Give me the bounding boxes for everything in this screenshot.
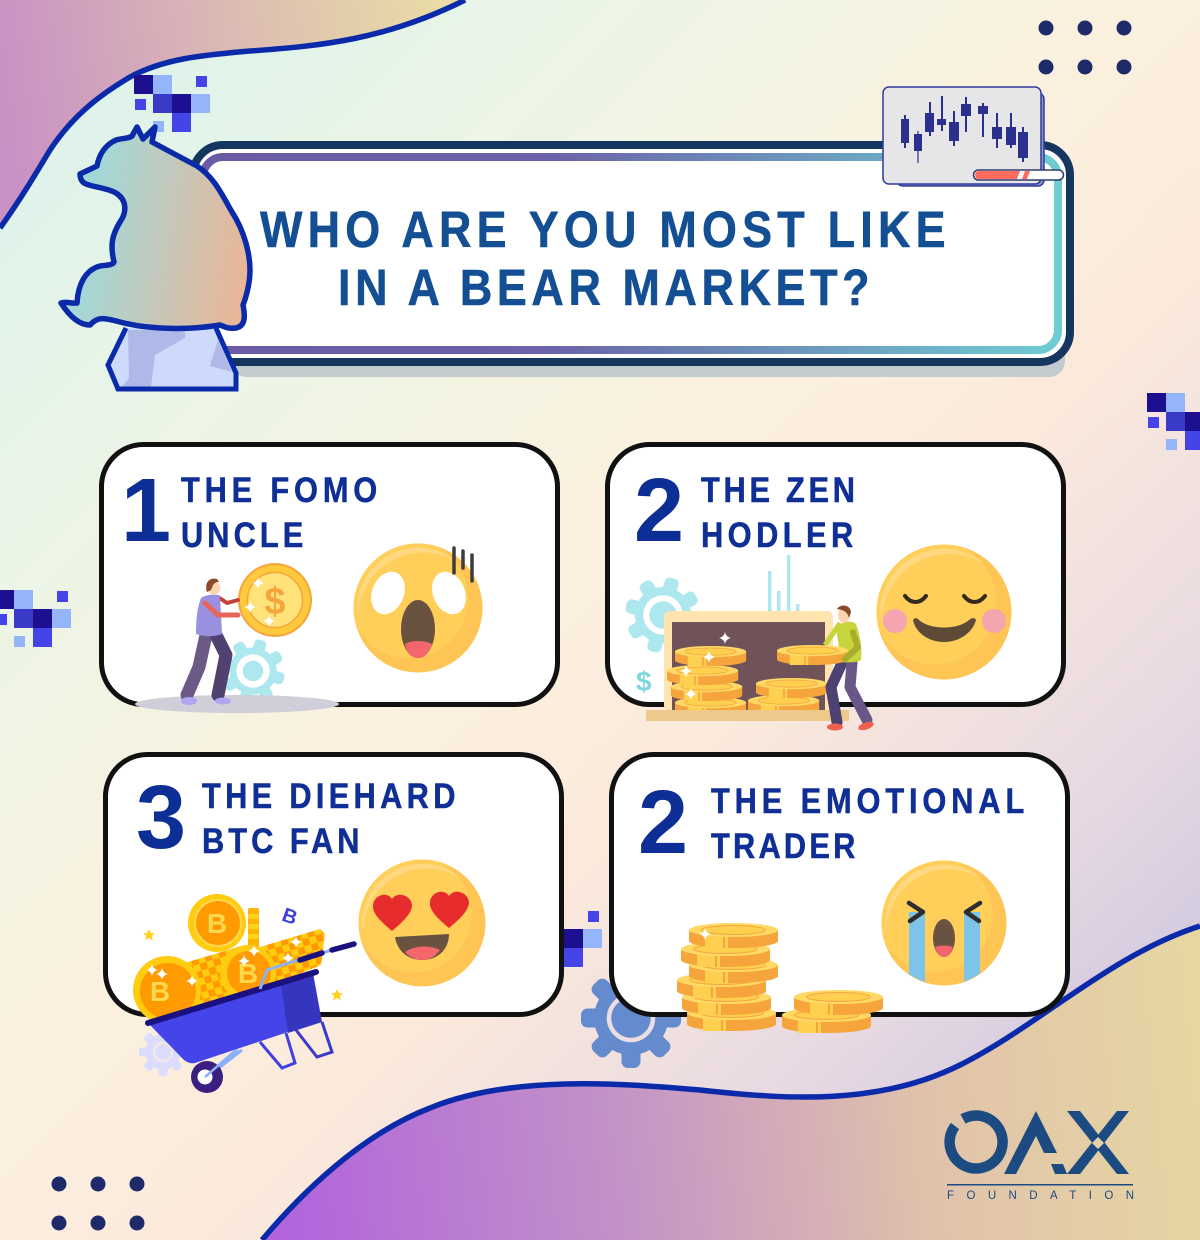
icon: calm smiling emoji [872,540,1012,680]
panel: card 2 [608,444,1064,704]
heading: the zen hodler: HODLER [701,515,853,554]
icon: wheelbarrow with bitcoins: B [238,958,258,989]
icon: bear silhouette [61,127,250,328]
heading: the fomo uncle: THE FOMO [181,470,377,509]
icon: rock under bear [108,328,236,389]
title line 2: IN A BEAR MARKET? [338,260,870,317]
icon: crying emoji [882,860,1006,986]
icon: man pushing coin: $ [264,581,286,623]
panel: card 1 [102,444,558,704]
heading: the diehard btc fan: THE DIEHARD [202,776,455,815]
icon: heart eyes emoji [355,856,486,986]
heading: the emotional trader: THE EMOTIONAL [711,781,1024,820]
icon: wheelbarrow with bitcoins: B [150,976,170,1007]
wave: top left [0,0,465,228]
dots: bottom left [52,1176,144,1230]
heading: the emotional trader [711,781,1024,865]
logo wordmark: FOUNDATION [947,1190,1134,1202]
pixel cluster: centre [526,910,602,967]
panel: card 4 [612,754,1068,1014]
icon: man pushing coin [135,563,339,713]
title line 1: WHO ARE YOU MOST LIKE [260,202,946,259]
icon: wheelbarrow with bitcoins [133,894,354,1093]
bitcoin glyph: B [279,904,300,930]
pixel cluster: top [134,75,210,132]
heading: the zen hodler: THE ZEN [701,470,855,509]
pixel cluster: right [1147,393,1200,450]
icon: pale gear [139,1028,187,1076]
number 3: 3 [136,768,186,868]
icon: large blue gear [581,968,681,1068]
heading: the diehard btc fan [202,776,455,860]
icon: laptop with coins and man: $ [636,666,652,697]
panel: card 3 [106,754,562,1014]
logo: OAX Foundation [947,1111,1134,1202]
pixel cluster: left [0,590,71,647]
number 2: 2 [634,461,684,561]
heading: the fomo uncle [181,470,377,554]
heading: the fomo uncle: UNCLE [181,515,303,554]
number 1: 1 [121,461,171,561]
chart: candlestick panel [883,87,1064,186]
icon: wheelbarrow with bitcoins: B [207,908,227,939]
title panel [193,145,1070,377]
heading: the diehard btc fan: BTC FAN [202,821,360,860]
icon: laptop with coins and man [616,555,875,732]
heading: the zen hodler [701,470,855,554]
progress bar [974,170,1064,180]
icon: shocked emoji [350,540,482,672]
dots: top right [1038,20,1132,74]
wave: bottom right [262,926,1200,1240]
icon: coin stacks [677,923,883,1033]
heading: the emotional trader: TRADER [711,826,855,865]
number 2: 2 [638,773,688,873]
